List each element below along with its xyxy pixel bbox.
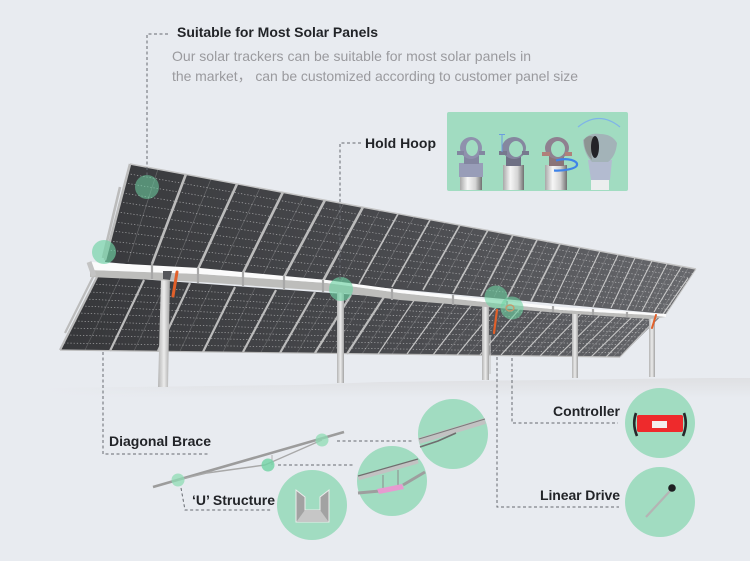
detail circle: linear drive bbox=[625, 467, 695, 537]
description text: the market， can be customized according to customer panel size bbox=[172, 68, 578, 84]
description text: Our solar trackers can be suitable for most solar panels in bbox=[172, 48, 531, 64]
leader: controller bbox=[512, 358, 618, 423]
support posts bbox=[158, 278, 655, 387]
diagram: brace assembly bbox=[153, 432, 344, 487]
leader: U structure bbox=[181, 488, 272, 510]
hoop step 4 bbox=[578, 118, 620, 190]
panel: hold hoop steps bbox=[447, 112, 628, 191]
label: linear drive: Linear Drive bbox=[540, 487, 620, 503]
detail circle: controller bbox=[625, 388, 695, 458]
detail circle: brace end bbox=[418, 399, 488, 469]
hoop step 1 bbox=[457, 137, 485, 190]
hoop step 2 bbox=[499, 134, 529, 190]
label: U structure: ‘U’ Structure bbox=[192, 492, 275, 508]
leader: diagonal brace bbox=[103, 352, 209, 454]
detail circle: centre brace bbox=[357, 446, 427, 516]
leader: centre brace bbox=[278, 464, 353, 466]
hotspot: controller bbox=[500, 296, 524, 320]
lower solar panels bbox=[60, 275, 660, 357]
detail circle: U structure bbox=[277, 470, 347, 540]
label: hold hoop: Hold Hoop bbox=[365, 135, 436, 151]
hotspot: U structure bbox=[172, 474, 184, 486]
leader: hold hoop bbox=[340, 143, 361, 279]
orange actuators bbox=[173, 272, 656, 333]
hoop step 3 bbox=[542, 137, 577, 190]
hotspot: diagonal brace bbox=[92, 240, 116, 264]
hotspot: centre brace bbox=[262, 458, 274, 472]
leader: brace end bbox=[337, 440, 413, 442]
leader: panels bbox=[147, 34, 168, 175]
label: controller: Controller bbox=[553, 403, 621, 419]
hotspot: linear drive bbox=[484, 286, 508, 308]
hotspot: brace end bbox=[316, 434, 328, 446]
hotspot: hold hoop bbox=[329, 277, 353, 301]
hotspot: panels bbox=[135, 175, 159, 199]
label: diagonal brace: Diagonal Brace bbox=[109, 433, 211, 449]
torque beam bbox=[89, 262, 666, 319]
upper solar panels bbox=[103, 164, 696, 314]
heading: suitable for most solar panels: Suitable for Most Solar Panels bbox=[177, 24, 378, 40]
solar tracker bbox=[60, 164, 696, 387]
floor shadow bbox=[40, 376, 750, 400]
leader: linear drive bbox=[497, 357, 619, 507]
